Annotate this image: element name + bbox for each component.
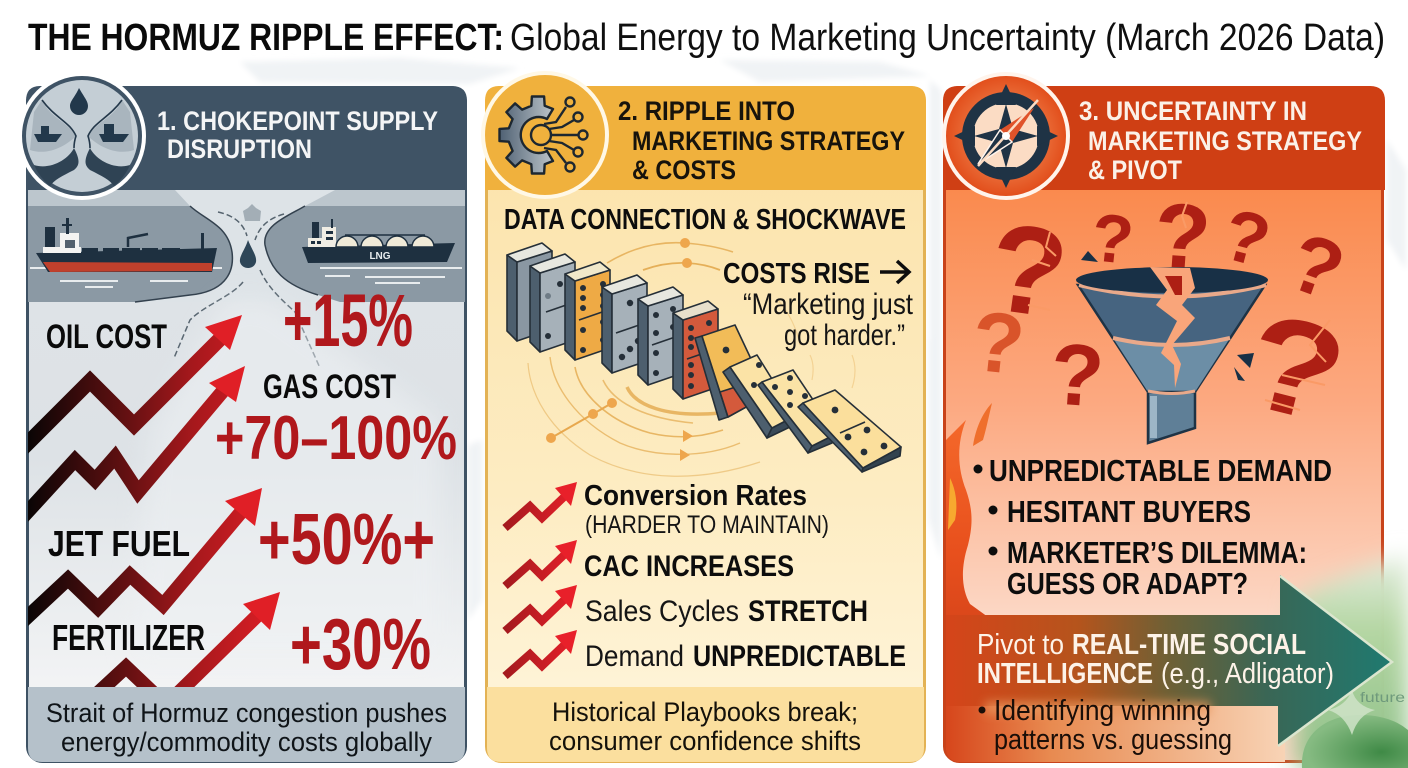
stat: fertilizer: +30%: [290, 605, 431, 685]
pivot text: REAL-TIME SOCIAL: [1072, 629, 1306, 661]
standing dominoes: [507, 243, 718, 399]
list item: demand: UNPREDICTABLE: [693, 640, 906, 673]
domino 10: [798, 390, 901, 472]
shockwave nodes: [546, 238, 693, 461]
list item: conversion rates: Conversion Rates: [584, 480, 807, 512]
panel 3 heading: [1079, 96, 1362, 185]
domino 8: [723, 355, 795, 438]
panel 1 footer: Strait of Hormuz congestion pushes: [46, 698, 447, 728]
panel 1 footer: energy/commodity costs globally: [61, 727, 432, 757]
panel 2 heading: & COSTS: [632, 155, 736, 185]
stat: fertilizer: [52, 605, 431, 685]
icon: distant ship: [243, 204, 261, 221]
icon: trend arrow 2: [505, 540, 577, 586]
pivot text: Pivot to: [977, 629, 1064, 661]
panel 2 footer: [487, 687, 924, 762]
falling dominoes: [695, 325, 901, 472]
panel 1 heading: DISRUPTION: [167, 134, 312, 164]
list item: demand: [585, 640, 906, 673]
arrow: fertilizer: [94, 592, 280, 687]
stat: oil cost: OIL COST: [46, 318, 167, 356]
panel 3 header bar: [943, 86, 1385, 190]
list item: demand: Demand: [585, 640, 684, 673]
icon: gear circuit badge: [481, 71, 609, 199]
icon: LNG carrier: [302, 219, 455, 263]
costs rise callout: COSTS RISE: [723, 258, 870, 290]
lower strip: [946, 700, 1285, 762]
panel: ripple into marketing: [481, 71, 926, 762]
flames: [946, 403, 1020, 640]
arrow: oil cost: [22, 315, 242, 449]
question marks: [967, 184, 1360, 452]
question marks: ?: [1214, 193, 1278, 283]
background world map: [240, 58, 1406, 620]
list item: sales cycles: [585, 595, 868, 628]
icon: trend arrow 3: [505, 585, 577, 631]
pivot text: (e.g., Adligator): [1161, 658, 1334, 690]
stat: oil cost: +15%: [283, 279, 413, 362]
domino 2: [530, 254, 575, 352]
panel 2 footer: consumer confidence shifts: [549, 726, 861, 756]
pivot bullet: [978, 695, 1232, 756]
domino 7: [695, 325, 768, 420]
panel 1 rising arrows: [22, 315, 280, 705]
shockwave rings: [528, 243, 855, 476]
stat: gas cost: +70–100%: [215, 404, 457, 473]
domino 4: [602, 275, 647, 373]
question marks: ?: [1151, 184, 1214, 290]
green corner glow: [1296, 555, 1408, 768]
arrow: gas cost: [22, 366, 245, 518]
costs rise callout: [723, 258, 914, 352]
list item: sales cycles: STRETCH: [748, 595, 868, 628]
pivot text: INTELLIGENCE: [977, 658, 1153, 690]
icon: strait badge: [18, 72, 146, 200]
title: THE HORMUZ RIPPLE EFFECT:: [28, 17, 504, 59]
stat: jet fuel: JET FUEL: [48, 523, 190, 564]
icon: oil drop in strait: [240, 240, 256, 268]
strait wake: [130, 300, 440, 660]
stat: jet fuel: +50%+: [258, 500, 435, 580]
icon: trend arrow 4: [505, 630, 577, 676]
panel 1 heading: [157, 106, 438, 164]
question marks: ?: [1047, 325, 1107, 426]
domino 3: [565, 262, 610, 360]
costs rise callout: “Marketing just: [743, 288, 914, 321]
panel: uncertainty and pivot: [942, 72, 1408, 768]
list item: conversion rates: [584, 480, 829, 539]
stat: fertilizer: FERTILIZER: [52, 617, 205, 658]
panel 3 body: [944, 88, 1382, 762]
question mark cracks: [1028, 202, 1330, 410]
panel 2 heading: 2. RIPPLE INTO: [618, 96, 795, 126]
panel 2 body: [486, 88, 924, 762]
broken funnel: [1076, 267, 1268, 443]
bullets: uncertainty: [974, 453, 1332, 601]
impact list: [505, 480, 906, 676]
icon: LNG carrier: LNG: [369, 251, 391, 262]
watermark: future: [1360, 689, 1405, 705]
domino 5: [638, 287, 683, 385]
icon: compass badge: [942, 72, 1070, 200]
stat: gas cost: [215, 368, 457, 473]
bullets: uncertainty: UNPREDICTABLE DEMAND: [989, 453, 1332, 488]
bullets: uncertainty: HESITANT BUYERS: [1007, 494, 1251, 529]
stat: gas cost: GAS COST: [263, 368, 396, 406]
question marks: ?: [967, 294, 1029, 394]
panel 2 heading: [618, 96, 905, 185]
question marks: ?: [1231, 283, 1360, 452]
domino 1: [507, 243, 552, 341]
bullets: uncertainty: MARKETER’S DILEMMA:: [1007, 535, 1307, 570]
list item: CAC increases: CAC INCREASES: [584, 550, 794, 583]
arrow: jet fuel: [22, 488, 262, 622]
domino 6: [673, 301, 718, 399]
panel 1 footer: [28, 687, 465, 762]
icon: oil tanker: [36, 218, 217, 272]
funnel crack: [1150, 267, 1195, 388]
panel: chokepoint supply disruption: [18, 72, 467, 762]
question marks: ?: [1277, 216, 1356, 318]
panel 2 subheading: DATA CONNECTION & SHOCKWAVE: [504, 204, 906, 236]
panel 1 header bar: [26, 86, 467, 190]
question marks: ?: [980, 197, 1075, 345]
panel 3 heading: 3. UNCERTAINTY IN: [1079, 96, 1307, 126]
panel 2 header bar: [485, 86, 926, 190]
domino 9: [758, 370, 836, 453]
pivot bullet: Identifying winning: [994, 695, 1211, 727]
bullets: uncertainty: GUESS OR ADAPT?: [1007, 566, 1248, 601]
panel 3 heading: MARKETING STRATEGY: [1088, 126, 1362, 156]
funnel shards: [1081, 251, 1254, 381]
list item: conversion rates: (HARDER TO MAINTAIN): [585, 511, 829, 539]
pivot text: [977, 629, 1334, 690]
panel 1 shipping scene: [28, 190, 465, 368]
question marks: ?: [1088, 199, 1137, 279]
stat: jet fuel: [48, 500, 435, 580]
panel 1 body: [28, 88, 466, 762]
costs rise callout: got harder.”: [784, 319, 905, 352]
stat: oil cost: [46, 279, 413, 362]
icon: trend arrow 1: [505, 482, 577, 528]
title: [28, 17, 1385, 59]
panel 3 heading: & PIVOT: [1088, 155, 1182, 185]
pivot arrow: [946, 575, 1392, 746]
panel 1 heading: 1. CHOKEPOINT SUPPLY: [157, 106, 438, 136]
panel 2 heading: MARKETING STRATEGY: [632, 126, 905, 156]
panel 2 footer: Historical Playbooks break;: [552, 697, 858, 727]
list item: sales cycles: Sales Cycles: [585, 595, 739, 628]
pivot bullet: patterns vs. guessing: [994, 724, 1232, 756]
